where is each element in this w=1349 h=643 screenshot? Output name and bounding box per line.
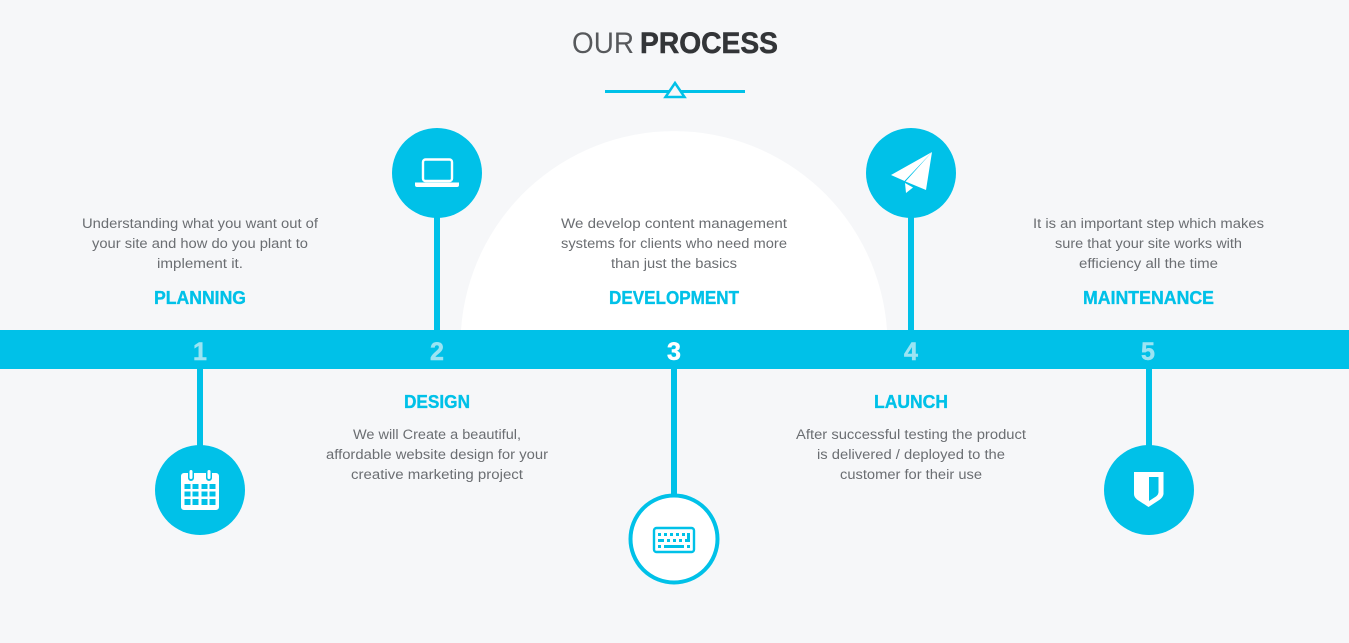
step 5: maintenance [1033, 216, 1264, 535]
launch heading: LAUNCH [874, 392, 948, 412]
icon: calendar [181, 470, 219, 510]
title: PROCESS [640, 27, 778, 60]
step numbers: 4 [904, 338, 918, 366]
planning heading: PLANNING [154, 288, 246, 308]
step 4: launch [796, 128, 1026, 482]
step 3: development [561, 216, 787, 582]
launch stem [908, 214, 914, 330]
launch description [796, 427, 1026, 482]
step numbers: 2 [430, 338, 444, 366]
icon: paper plane [891, 152, 932, 193]
maintenance description: efficiency all the time [1079, 256, 1218, 271]
design stem [434, 214, 440, 330]
icon: keyboard [654, 528, 694, 552]
design circle [392, 128, 482, 218]
development circle [630, 496, 718, 582]
icon: shield [1134, 472, 1164, 507]
step numbers [193, 338, 1155, 366]
launch description: is delivered / deployed to the [817, 447, 1005, 462]
step numbers: 5 [1141, 338, 1155, 366]
step 2: design [326, 128, 549, 482]
maintenance circle [1104, 445, 1194, 535]
maintenance description: sure that your site works with [1055, 236, 1242, 251]
title: OUR [572, 27, 634, 60]
development stem [671, 369, 677, 497]
white semicircle behind step 3 [461, 131, 887, 330]
maintenance description [1033, 216, 1264, 271]
step 1: planning [82, 216, 318, 535]
step numbers: 3 [667, 338, 681, 366]
development description: We develop content management [561, 216, 787, 231]
timeline band [0, 330, 1349, 369]
planning description [82, 216, 318, 271]
step numbers: 1 [193, 338, 207, 366]
planning description: your site and how do you plant to [92, 236, 308, 251]
development description: systems for clients who need more [561, 236, 787, 251]
planning description: Understanding what you want out of [82, 216, 318, 231]
launch description: customer for their use [840, 467, 982, 482]
development description [561, 216, 787, 271]
launch description: After successful testing the product [796, 427, 1026, 442]
development heading: DEVELOPMENT [609, 288, 739, 308]
planning stem [197, 369, 203, 449]
maintenance heading: MAINTENANCE [1083, 288, 1214, 308]
development description: than just the basics [611, 256, 737, 271]
icon: laptop [415, 160, 459, 187]
title divider with triangle [605, 83, 745, 97]
title [572, 27, 778, 60]
planning description: implement it. [157, 256, 243, 271]
design description: We will Create a beautiful, [353, 427, 521, 442]
design description [326, 427, 549, 482]
design description: creative marketing project [351, 467, 523, 482]
design description: affordable website design for your [326, 447, 549, 462]
design heading: DESIGN [404, 392, 470, 412]
maintenance stem [1146, 369, 1152, 449]
planning circle [155, 445, 245, 535]
launch circle [866, 128, 956, 218]
maintenance description: It is an important step which makes [1033, 216, 1264, 231]
